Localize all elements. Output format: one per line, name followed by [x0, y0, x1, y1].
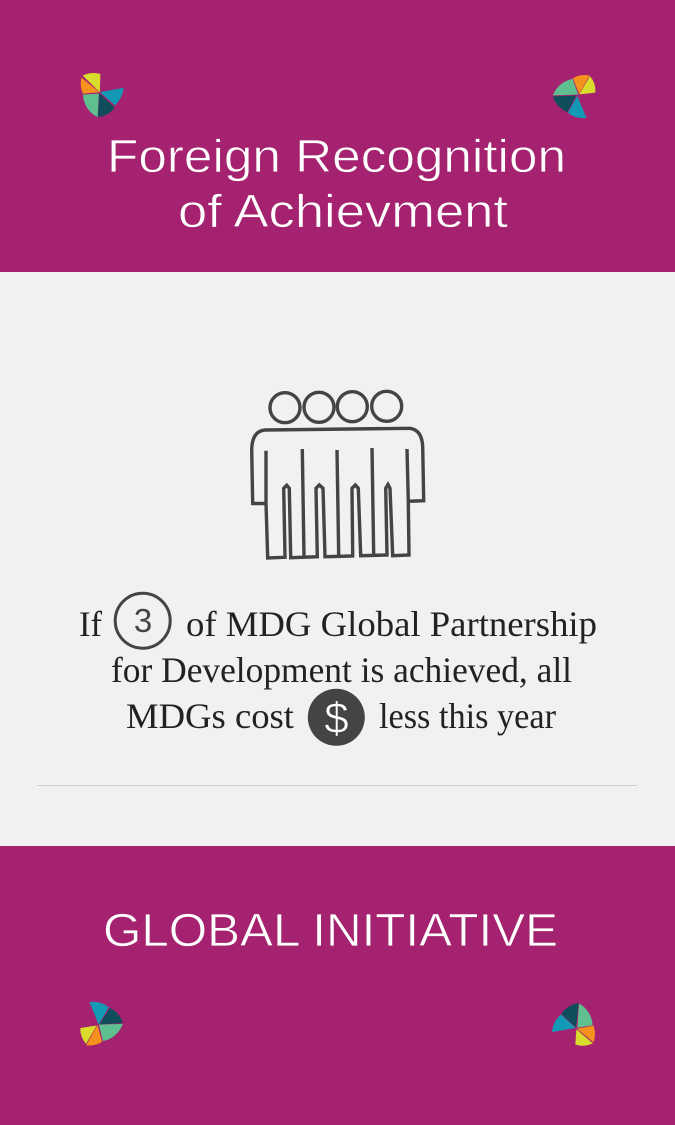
- heading: global initiative: GLOBAL INITIATIVE: [103, 904, 558, 956]
- text block: statement: If: [79, 604, 102, 644]
- icon: group of four people: [252, 391, 424, 558]
- title: [107, 130, 566, 237]
- badge: number 3: 3: [134, 602, 152, 639]
- title: Foreign Recognition: [107, 130, 566, 182]
- badge: number 3: [115, 593, 170, 648]
- badge: dollar sign: $: [324, 694, 349, 743]
- text block: statement: [79, 593, 597, 746]
- text block: statement: of MDG Global Partnership: [186, 604, 597, 644]
- panel: bottom footer band: [0, 846, 675, 1125]
- text block: statement: for Development is achieved, all: [111, 650, 572, 690]
- icon: bottom-left pinwheel logo: [81, 1002, 122, 1045]
- icon: bottom-right pinwheel logo: [552, 1003, 595, 1045]
- icon: top-left pinwheel logo: [81, 73, 123, 117]
- text block: statement: less this year: [379, 696, 556, 736]
- text block: statement: MDGs cost: [126, 696, 294, 736]
- badge: dollar sign: [308, 689, 365, 746]
- icon: top-right pinwheel logo: [553, 75, 595, 118]
- title: of Achievment: [178, 185, 508, 237]
- panel: top header band: [0, 0, 675, 272]
- panel: central content: [0, 272, 675, 846]
